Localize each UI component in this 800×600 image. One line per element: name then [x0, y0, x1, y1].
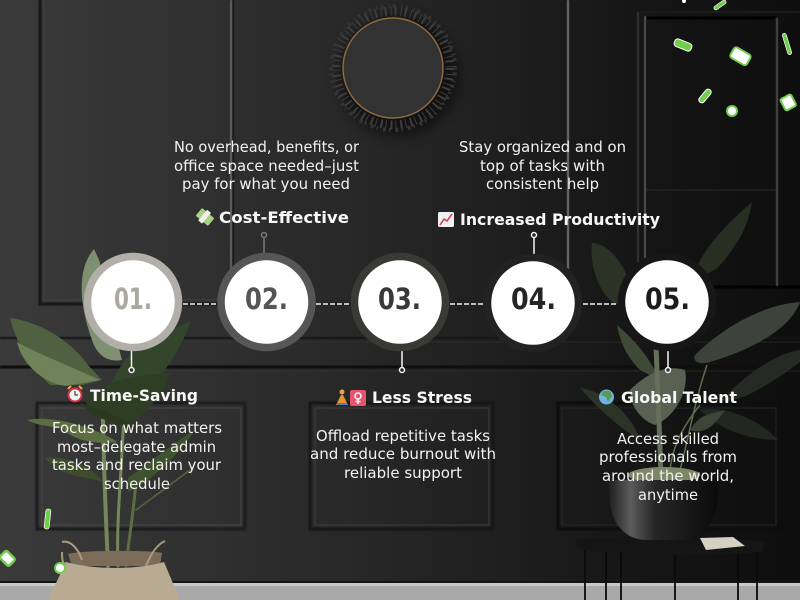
confetti: top right: [673, 0, 797, 116]
step 03 title: Less Stress: [372, 388, 472, 407]
step 03 text: [310, 427, 496, 482]
step 01 circle: [88, 256, 178, 348]
plant leaves: [82, 249, 122, 360]
step 05 text: [599, 430, 737, 504]
step 03 icon: female sign: [350, 390, 366, 406]
step 03 text: and reduce burnout with: [310, 445, 496, 463]
step 02 stem: [262, 232, 266, 255]
step 05 stem: [666, 345, 670, 372]
pot: [609, 480, 718, 540]
step 03 icon: meditation: [336, 390, 348, 405]
step 01 text: most–delegate admin: [57, 438, 216, 456]
step 01 icon: alarm clock: [68, 386, 82, 402]
step 04 number: 04.: [511, 282, 556, 316]
step 01 number: 01.: [114, 282, 152, 316]
step 02 text: No overhead, benefits, or: [174, 138, 360, 156]
mirror: [331, 6, 458, 136]
basket: [48, 541, 180, 600]
step 04 stem: [532, 232, 536, 258]
step 01 text: Focus on what matters: [52, 419, 222, 437]
step 02 text: [174, 138, 360, 193]
step 04 icon: chart: [438, 212, 454, 227]
right plant: [580, 202, 800, 483]
step 01: [52, 256, 222, 493]
step 05 text: around the world,: [602, 467, 734, 485]
step 01 title: Time-Saving: [90, 386, 198, 405]
step 05 text: anytime: [638, 486, 698, 504]
step 05 text: professionals from: [599, 448, 737, 466]
dashed connectors: [183, 303, 618, 305]
step 04 text: [459, 138, 626, 193]
left plant: [10, 249, 195, 566]
plant stems: [103, 410, 190, 566]
baseboard: [0, 581, 800, 600]
step 01 text: schedule: [104, 475, 170, 493]
step 02 number: 02.: [245, 282, 288, 316]
step 04 text: consistent help: [486, 175, 599, 193]
step 01 text: [52, 419, 222, 493]
step 04 circle: [488, 258, 578, 348]
step 03 text: reliable support: [344, 464, 462, 482]
confetti: bottom left: [0, 509, 65, 573]
step 05 icon: globe: [599, 390, 614, 404]
step 02 text: pay for what you need: [182, 175, 350, 193]
step 04 title: Increased Productivity: [460, 210, 661, 229]
step 03 circle: [354, 256, 446, 348]
step 02 icon: money: [194, 206, 216, 228]
step 02 text: office space needed–just: [174, 157, 359, 175]
step 03: [310, 256, 496, 482]
step 02 circle: [221, 256, 312, 348]
step 02: [174, 138, 360, 348]
step 03 stem: [400, 345, 404, 372]
step 05 text: Access skilled: [617, 430, 719, 448]
step 01 stem: [129, 345, 134, 372]
step 02 title: Cost-Effective: [219, 208, 349, 227]
table: [575, 537, 765, 600]
step 05 number: 05.: [645, 282, 690, 316]
step 04 text: Stay organized and on: [459, 138, 626, 156]
step 03 number: 03.: [378, 282, 421, 316]
step 04: [438, 138, 661, 348]
book: [700, 537, 745, 550]
step 05 circle: [622, 256, 712, 348]
step 05 title: Global Talent: [621, 388, 737, 407]
soil: [628, 467, 700, 483]
step 01 text: tasks and reclaim your: [52, 456, 222, 474]
step 05: [599, 256, 737, 504]
step 03 text: Offload repetitive tasks: [316, 427, 490, 445]
step 04 text: top of tasks with: [480, 157, 605, 175]
